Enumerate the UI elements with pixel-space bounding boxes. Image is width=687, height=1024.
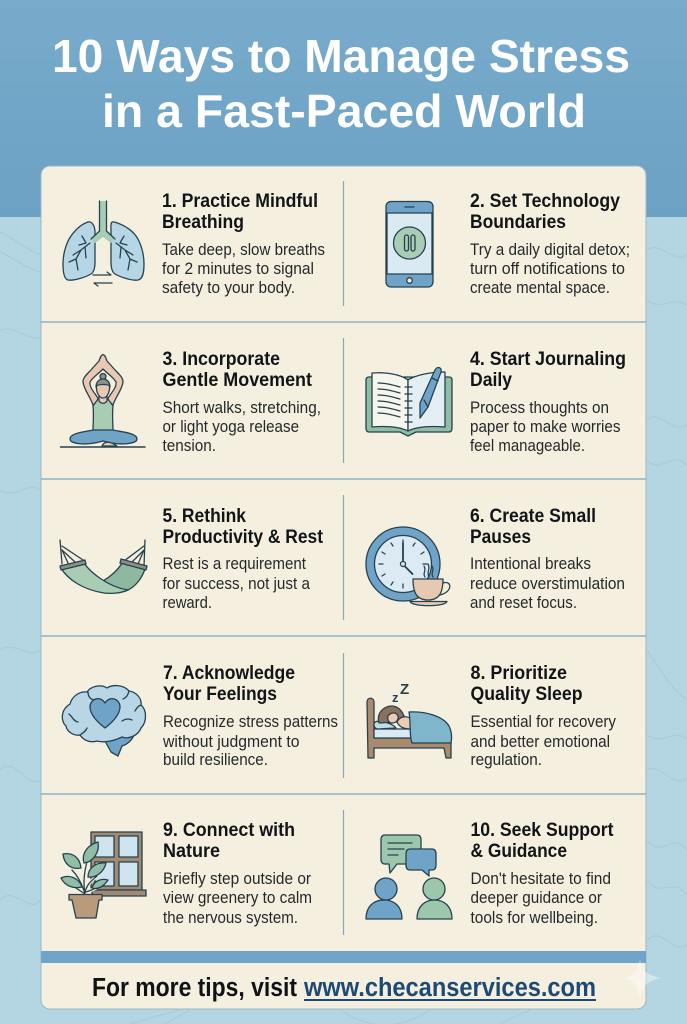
tip 5 panel (60, 506, 324, 612)
description: tip 10: deeper guidance or (470, 888, 602, 907)
heading: tip 3: Gentle Movement (162, 370, 313, 391)
heading: tip 7 (163, 663, 295, 705)
description: tip 6: Intentional breaks (470, 554, 591, 573)
tip 3 panel (60, 349, 321, 455)
description: tip 10: Don't hesitate to find (470, 869, 611, 888)
description: tip 9: the nervous system. (163, 908, 298, 927)
icon: phone with pause button (386, 202, 433, 287)
description: tip 5: for success, not just a (162, 574, 310, 593)
heading: tip 4 (470, 349, 626, 391)
heading: tip 7: 7. Acknowledge (163, 663, 295, 684)
icon: sparkle watermark (625, 959, 662, 998)
description: tip 8: regulation. (470, 750, 542, 769)
icon: brain with heart (62, 686, 146, 756)
description: tip 7: Recognize stress patterns (163, 712, 338, 731)
description: tip 2 (470, 240, 630, 297)
main card (41, 166, 646, 1009)
description: tip 3: tension. (162, 436, 216, 455)
description: tip 4: Process thoughts on (470, 398, 609, 417)
icon: person sleeping in bed: z (392, 690, 399, 705)
heading: tip 3: 3. Incorporate (162, 349, 280, 370)
icon: two people talking (366, 835, 452, 919)
description: tip 1: for 2 minutes to signal (162, 259, 314, 278)
description: tip 8: Essential for recovery (470, 712, 616, 731)
description: tip 9 (163, 869, 312, 927)
title: 10 Ways to Manage Stress (52, 30, 630, 82)
heading: tip 4: Daily (470, 370, 512, 391)
description: tip 3 (162, 398, 321, 455)
icon: yoga figure (60, 354, 145, 447)
description: tip 8: and better emotional (470, 732, 610, 751)
description: tip 10: tools for wellbeing. (470, 908, 598, 927)
description: tip 4: feel manageable. (470, 436, 585, 455)
description: tip 5 (162, 554, 310, 612)
heading: tip 3 (162, 349, 313, 391)
icon: clock and tea cup (366, 527, 450, 606)
icon: lungs (63, 201, 144, 286)
tip 2 panel (386, 191, 630, 297)
heading: tip 1: 1. Practice Mindful (162, 191, 318, 212)
icon: hammock (60, 540, 147, 593)
heading: tip 8 (470, 663, 582, 705)
heading: tip 9 (163, 820, 295, 862)
description: tip 2: Try a daily digital detox; (470, 240, 630, 259)
heading: tip 8: 8. Prioritize (470, 663, 567, 684)
description: tip 3: or light yoga release (162, 417, 299, 436)
heading: tip 2: 2. Set Technology (470, 191, 620, 212)
heading: tip 7: Your Feelings (163, 684, 277, 705)
icon: person sleeping in bed (367, 681, 452, 758)
heading: tip 1 (162, 191, 318, 233)
footer call to action: For more tips, visit (92, 974, 297, 1002)
description: tip 7: build resilience. (163, 750, 268, 769)
description: tip 4 (470, 398, 620, 455)
description: tip 10 (470, 869, 611, 927)
tip 6 panel (366, 506, 625, 612)
heading: tip 9: 9. Connect with (163, 820, 295, 841)
description: tip 7: without judgment to (162, 732, 300, 751)
description: tip 1: safety to your body. (162, 278, 295, 297)
tip 9 panel (61, 820, 312, 927)
heading: tip 5: Productivity & Rest (162, 527, 324, 548)
heading: tip 6: 6. Create Small (470, 506, 596, 527)
description: tip 5: Rest is a requirement (162, 554, 306, 573)
heading: tip 5: 5. Rethink (162, 506, 246, 527)
description: tip 7 (162, 712, 338, 769)
icon: window and potted plant (61, 832, 146, 918)
heading: tip 10 (470, 820, 614, 862)
description: tip 2: turn off notifications to (470, 259, 625, 278)
description: tip 3: Short walks, stretching, (162, 398, 321, 417)
heading: tip 9: Nature (163, 841, 220, 862)
description: tip 8 (470, 712, 616, 769)
heading: tip 10: 10. Seek Support (470, 820, 614, 841)
description: tip 5: reward. (162, 593, 212, 612)
footer call to action (92, 974, 596, 1002)
tip 1 panel (63, 191, 325, 297)
heading: tip 2 (470, 191, 620, 233)
title (52, 30, 630, 137)
heading: tip 5 (162, 506, 324, 548)
tip 8 panel (367, 663, 616, 769)
heading: tip 6 (470, 506, 596, 548)
tip 7 panel (62, 663, 338, 769)
footer call to action: www.checanservices.com (303, 974, 596, 1002)
description: tip 6: reduce overstimulation (470, 574, 625, 593)
description: tip 9: view greenery to calm (163, 888, 312, 907)
heading: tip 8: Quality Sleep (470, 684, 582, 705)
heading: tip 2: Boundaries (470, 212, 566, 233)
description: tip 2: create mental space. (470, 278, 610, 297)
description: tip 6: and reset focus. (470, 593, 577, 612)
icon: open journal and pen (366, 368, 452, 436)
description: tip 9: Briefly step outside or (163, 869, 311, 888)
description: tip 6 (470, 554, 625, 612)
heading: tip 1: Breathing (162, 212, 244, 233)
heading: tip 10: & Guidance (470, 841, 567, 862)
description: tip 1: Take deep, slow breaths (162, 240, 325, 259)
tip 4 panel (366, 349, 626, 455)
description: tip 4: paper to make worries (470, 417, 620, 436)
tip 10 panel (366, 820, 614, 927)
heading: tip 4: 4. Start Journaling (470, 349, 626, 370)
description: tip 1 (162, 240, 325, 297)
icon: person sleeping in bed: Z (400, 681, 409, 698)
title: in a Fast-Paced World (102, 85, 586, 137)
heading: tip 6: Pauses (470, 527, 531, 548)
